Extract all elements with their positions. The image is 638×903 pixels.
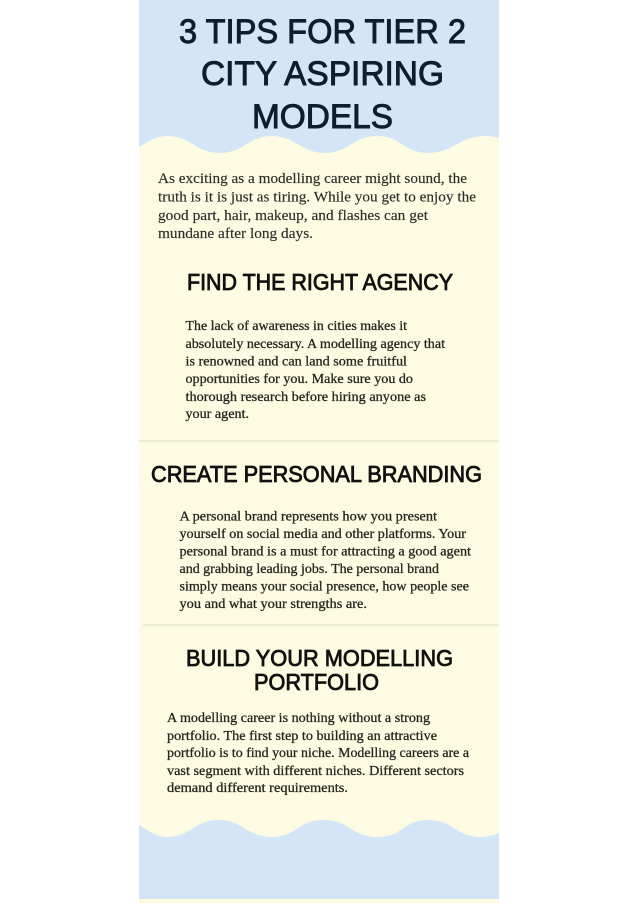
intro text: As exciting as a modelling career might sound, the: [158, 171, 467, 187]
body: create personal branding: [180, 510, 471, 612]
title: CITY ASPIRING: [201, 55, 444, 93]
body: find the right agency: opportunities for you. Make sure you do: [186, 372, 413, 387]
section: find the right agency: [186, 269, 453, 422]
body: build your modelling portfolio: vast segment with different niches. Different sectors: [167, 764, 464, 779]
body: find the right agency: The lack of awareness in cities makes it: [186, 319, 407, 334]
heading: build your modelling portfolio: PORTFOLIO: [254, 669, 379, 695]
section: create personal branding: [151, 461, 482, 612]
body: find the right agency: is renowned and can land some fruitful: [186, 354, 407, 370]
panel: cream background: [139, 0, 499, 903]
intro text: good part, hair, makeup, and flashes can get: [158, 208, 429, 224]
body: create personal branding: A personal brand represents how you present: [180, 510, 437, 524]
body: find the right agency: [186, 319, 445, 422]
header band: blue wave: [139, 0, 499, 153]
intro text: truth is it is just as tiring. While you get to enjoy the: [158, 190, 476, 206]
body: build your modelling portfolio: [167, 711, 470, 796]
title: [179, 13, 466, 136]
body: create personal branding: simply means your social presence, how people see: [180, 580, 469, 594]
body: build your modelling portfolio: portfolio. The first step to building an attractive: [167, 729, 437, 744]
body: create personal branding: you and what your strengths are.: [180, 597, 367, 612]
body: find the right agency: your agent.: [186, 407, 249, 422]
body: create personal branding: yourself on social media and other platforms. Your: [180, 527, 466, 542]
intro text: [158, 171, 476, 242]
footer band: blue wave: [139, 820, 499, 899]
heading: find the right agency: FIND THE RIGHT AGENCY: [187, 269, 453, 295]
body: create personal branding: personal brand is a must for attracting a good agent: [180, 544, 471, 560]
intro text: mundane after long days.: [158, 226, 313, 242]
body: find the right agency: absolutely necessary. A modelling agency that: [186, 337, 445, 352]
body: find the right agency: thorough research before hiring anyone as: [186, 390, 426, 405]
body: build your modelling portfolio: A modelling career is nothing without a strong: [167, 711, 430, 726]
title: 3 TIPS FOR TIER 2: [179, 13, 466, 51]
title: MODELS: [252, 98, 393, 136]
body: build your modelling portfolio: portfolio is to find your niche. Modelling careers are a: [167, 746, 470, 761]
heading: build your modelling portfolio: [186, 645, 453, 695]
heading: create personal branding: CREATE PERSONAL BRANDING: [151, 461, 482, 487]
body: build your modelling portfolio: demand different requirements.: [167, 781, 348, 796]
section: build your modelling portfolio: [167, 645, 470, 796]
heading: build your modelling portfolio: BUILD YOUR MODELLING: [186, 645, 453, 671]
body: create personal branding: and grabbing leading jobs. The personal brand: [180, 562, 439, 577]
